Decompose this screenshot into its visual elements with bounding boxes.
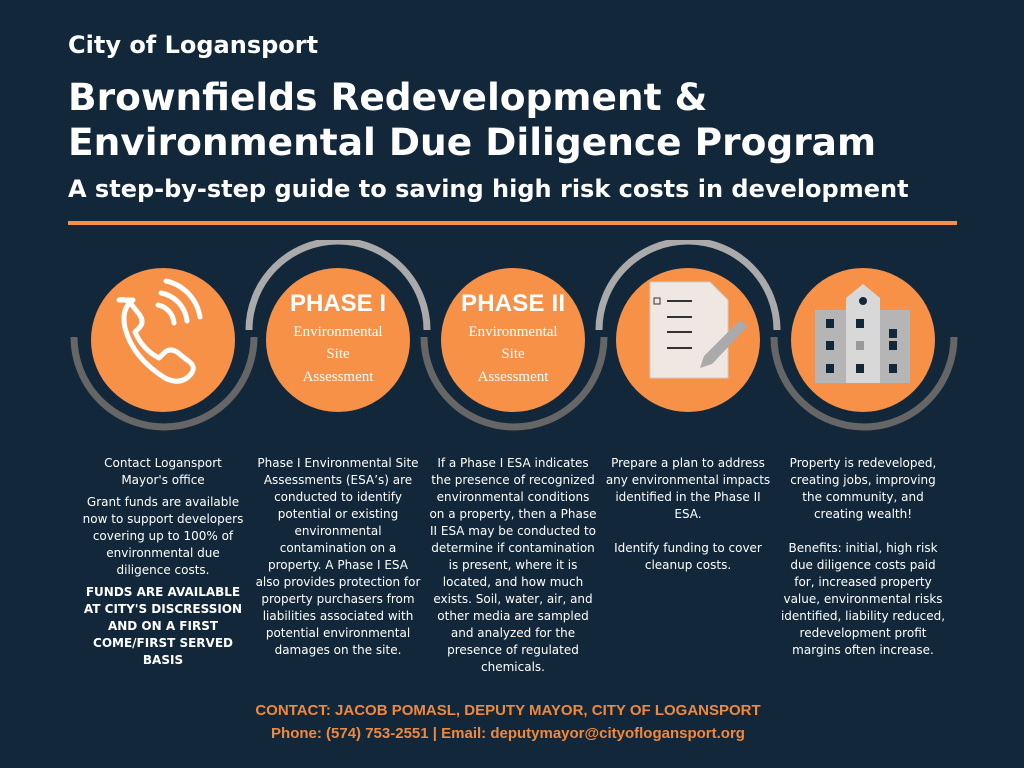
circle 3: phase II: Assessment bbox=[478, 369, 549, 385]
text: step 5: Benefits: initial, high risk due diligence costs paid for, increased property value, environmental risks identified, liability reduced, redevelopment profit margins often increase. bbox=[781, 541, 945, 657]
circle 3: phase II: PHASE II bbox=[461, 290, 565, 317]
text: step 5 bbox=[781, 456, 945, 657]
arcs bbox=[74, 241, 954, 427]
text: step 1: Contact Logansport Mayor's office bbox=[104, 456, 222, 487]
subtitle: A step-by-step guide to saving high risk costs in development bbox=[68, 175, 909, 203]
circle 2: phase I: PHASE I bbox=[290, 290, 386, 317]
circle 2: phase I: Assessment bbox=[303, 369, 374, 385]
title: main bbox=[68, 75, 876, 164]
title: main: Environmental Due Diligence Program bbox=[68, 120, 876, 164]
text: step 1: FUNDS ARE AVAILABLE AT CITY'S DISCRESSION AND ON A FIRST COME/FIRST SERVED BASIS bbox=[84, 585, 242, 667]
text: step 4 bbox=[606, 456, 770, 572]
circle 3: phase II bbox=[441, 268, 585, 412]
step circles bbox=[70, 240, 958, 430]
orange divider bbox=[68, 221, 957, 225]
text: step 4: Identify funding to cover cleanup costs. bbox=[614, 541, 762, 572]
circle 2: phase I bbox=[266, 268, 410, 412]
text: step 1: Grant funds are available now to support developers covering up to 100% of environmental due diligence costs. bbox=[83, 495, 243, 577]
title: city: City of Logansport bbox=[68, 31, 318, 59]
circle 1: phone bbox=[91, 268, 235, 412]
text: step 3: If a Phase I ESA indicates the presence of recognized environmental conditions on a property, then a Phase II ESA may be conducted to determine if contamination is present, where it is located, and how much exists. Soil, water, air, and other media are sampled and analyzed for the presence of regulated chemicals. bbox=[429, 456, 597, 674]
title: main: Brownfields Redevelopment & bbox=[68, 75, 707, 119]
contact footer: Phone: (574) 753-2551 | Email: deputymayor@cityoflogansport.org bbox=[271, 725, 745, 742]
contact footer: CONTACT: JACOB POMASL, DEPUTY MAYOR, CITY OF LOGANSPORT bbox=[255, 702, 761, 719]
text: step 4: Prepare a plan to address any environmental impacts identified in the Phase II ESA. bbox=[606, 456, 770, 521]
circle 2: phase I: Environmental bbox=[293, 324, 383, 340]
circle 3: phase II: Site bbox=[501, 346, 525, 362]
contact footer bbox=[255, 702, 761, 742]
circle 3: phase II: Environmental bbox=[468, 324, 558, 340]
circle 4: document bbox=[616, 268, 760, 412]
text: step 1 bbox=[83, 456, 243, 667]
text: step 5: Property is redeveloped, creating jobs, improving the community, and creating wealth! bbox=[790, 456, 936, 521]
circle 2: phase I: Site bbox=[326, 346, 350, 362]
text: step 2: Phase I Environmental Site Assessments (ESA’s) are conducted to identify potential or existing environmental contamination on a property. A Phase I ESA also provides protection for property purchasers from liabilities associated with potential environmental damages on the site. bbox=[256, 456, 420, 657]
circle 5: buildings bbox=[791, 268, 935, 412]
